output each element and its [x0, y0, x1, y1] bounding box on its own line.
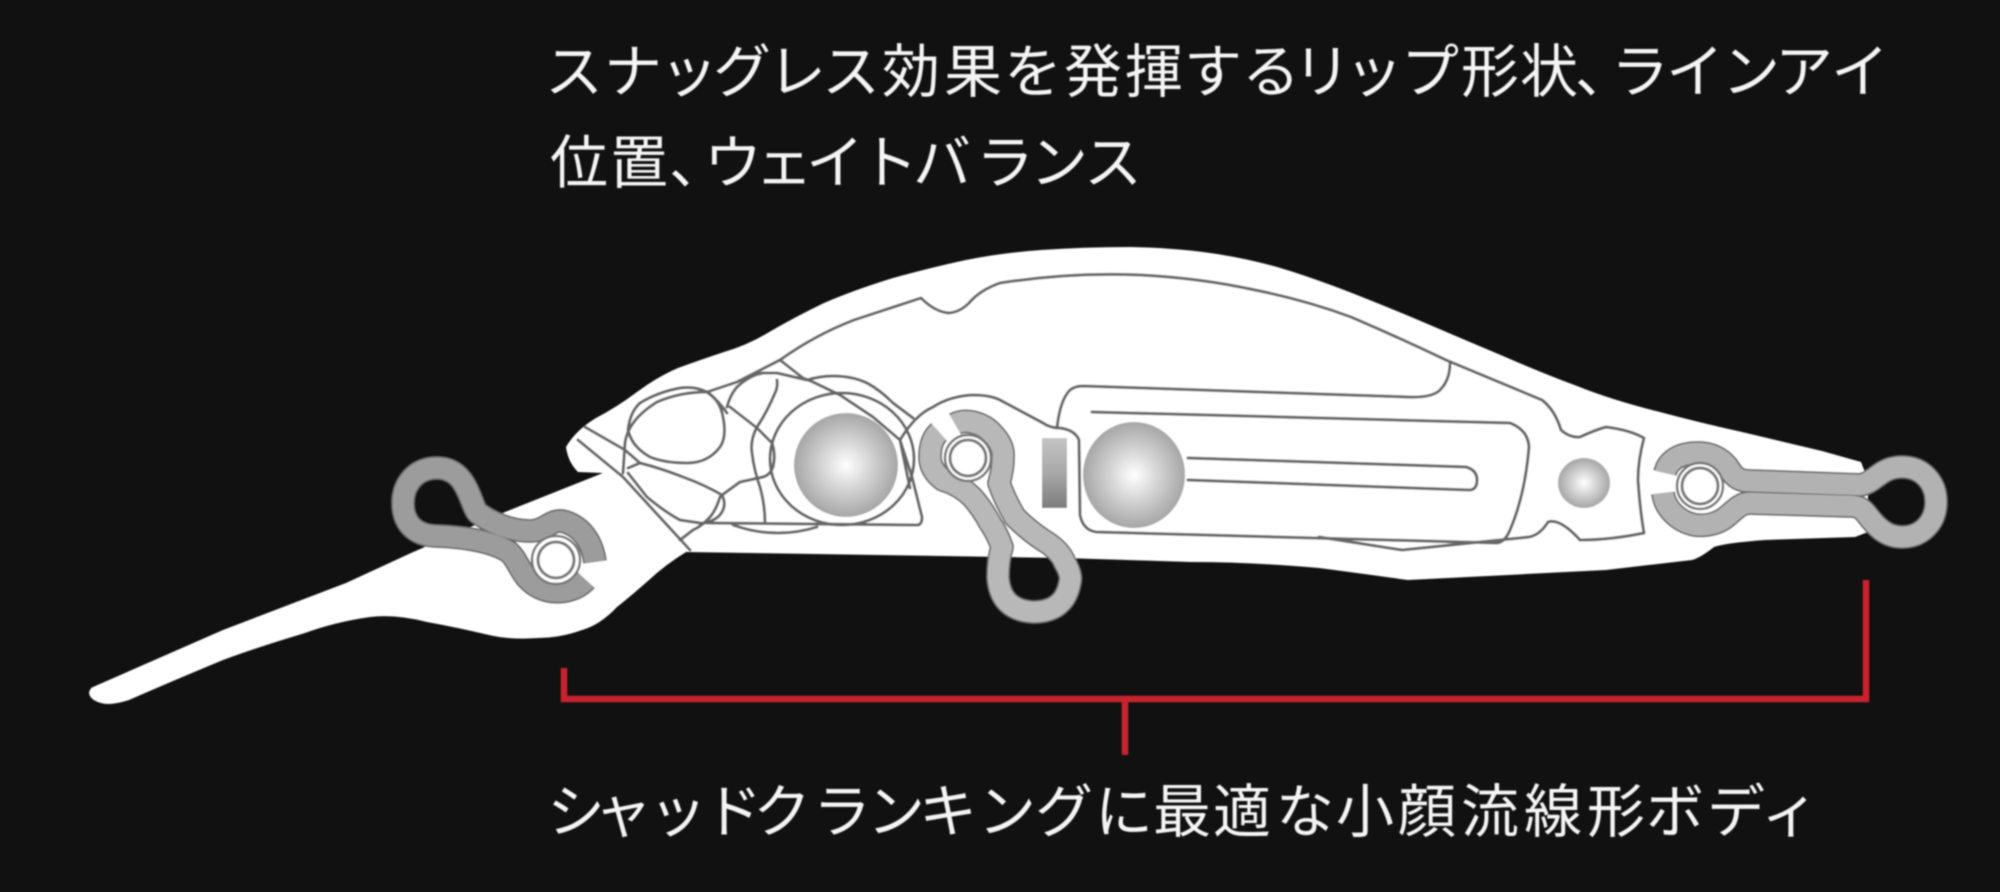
heading: lip shape, line eye and weight balance: 位置、ウェイトバランス — [550, 131, 1142, 196]
weight ball: middle — [1083, 422, 1185, 528]
heading: lip shape, line eye and weight balance — [545, 40, 1889, 196]
rear split ring and tail eye — [1663, 453, 1936, 537]
red dimension bracket — [564, 580, 1866, 755]
weight ball: small rear — [1558, 458, 1610, 508]
heading: lip shape, line eye and weight balance: スナッグレス効果を発揮するリップ形状、ラインアイ — [545, 40, 1889, 105]
front split ring and line eye — [403, 468, 595, 592]
lure diagram — [89, 247, 1936, 704]
weight ball: front — [794, 413, 898, 517]
internal frame lines — [578, 274, 1644, 550]
caption: small-head streamlined body: シャッドクランキングに最適な小顔流線形ボディ — [547, 780, 1819, 845]
rectangular weight — [1042, 438, 1067, 508]
lure body and lip silhouette — [89, 247, 1868, 704]
middle split ring and belly eye — [930, 421, 1070, 612]
